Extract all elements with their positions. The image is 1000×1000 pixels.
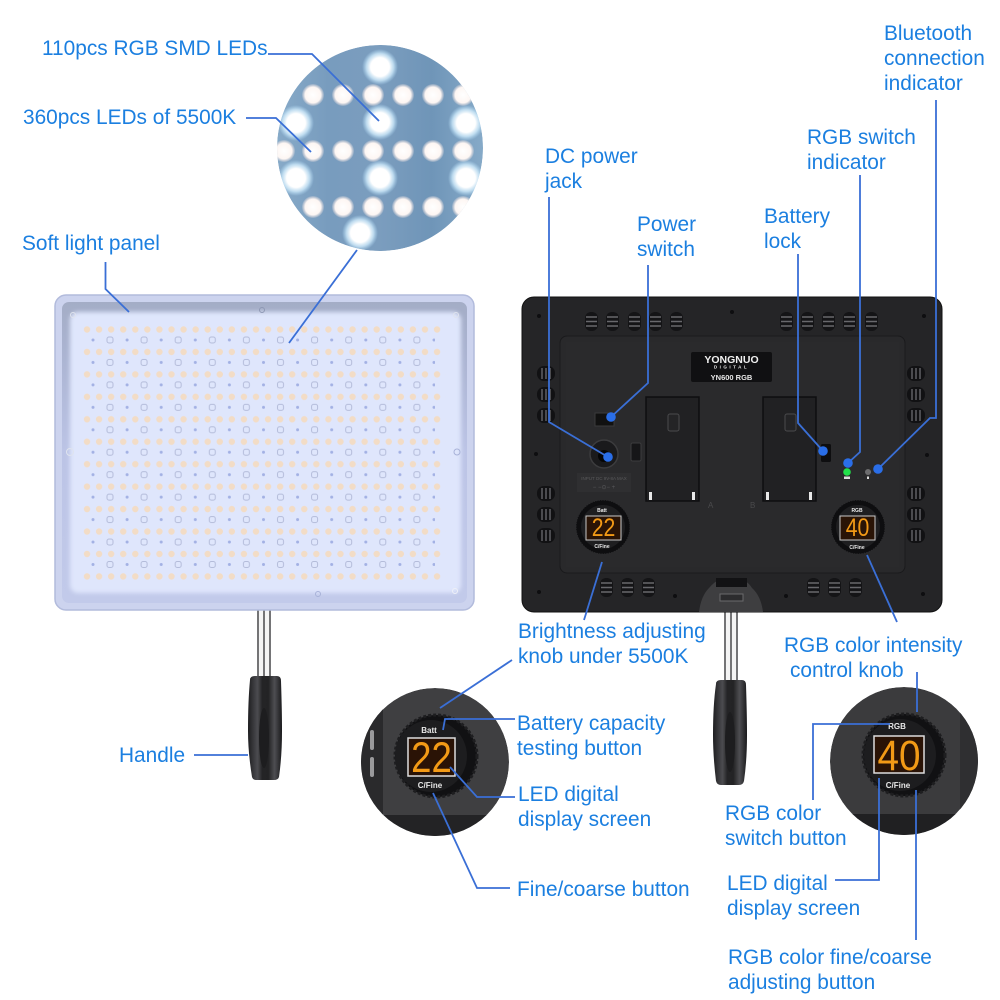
bluetooth indicator LED xyxy=(865,469,871,479)
label: brightness knob: knob under 5500K xyxy=(518,645,688,668)
inset: left knob closeup xyxy=(355,688,513,840)
vents xyxy=(537,312,925,597)
inset: right knob closeup xyxy=(830,687,980,837)
logo plate: YONGNUO xyxy=(704,354,759,366)
label: handle: Handle xyxy=(119,744,185,767)
input rating plate xyxy=(577,473,631,492)
right knob: 40 xyxy=(846,513,869,541)
label: bluetooth indicator: Bluetooth xyxy=(884,22,972,45)
connector dots xyxy=(603,412,883,474)
battery lock xyxy=(821,444,831,462)
label: LED screen right: display screen xyxy=(727,897,860,920)
callout lines front xyxy=(106,54,379,755)
label: power switch: switch xyxy=(637,238,695,261)
label: LED screen left: display screen xyxy=(518,808,651,831)
logo plate: YN600 RGB xyxy=(711,373,753,382)
label: battery lock: Battery xyxy=(764,205,830,228)
icon: left handle xyxy=(248,608,282,780)
screws xyxy=(534,310,929,598)
right knob: RGB xyxy=(851,508,863,514)
left knob: Batt xyxy=(597,508,607,514)
label: RGB LEDs: 110pcs RGB SMD LEDs xyxy=(42,37,268,60)
label: RGB switch indicator: indicator xyxy=(807,151,886,174)
panel: back of the light xyxy=(522,297,942,612)
side switch xyxy=(631,443,641,461)
label: LED screen left: LED digital xyxy=(518,783,619,806)
warm LEDs xyxy=(273,84,474,218)
bottom mount xyxy=(699,578,763,612)
inset: left knob closeup: Batt xyxy=(421,726,437,735)
label: RGB intensity knob: RGB color intensity xyxy=(784,634,962,657)
slot letter B: B xyxy=(750,501,755,510)
label: power switch: Power xyxy=(637,213,696,236)
label: RGB color switch: RGB color xyxy=(725,802,821,825)
label: RGB color switch: switch button xyxy=(725,827,847,850)
label: RGB fine coarse: adjusting button xyxy=(728,971,875,994)
left knob: C/Fine xyxy=(594,544,610,550)
inset: right knob closeup: RGB xyxy=(888,722,906,731)
left knob: 22 xyxy=(592,513,615,541)
label: LED screen right: LED digital xyxy=(727,872,828,895)
label: fine coarse button: Fine/coarse button xyxy=(517,878,690,901)
icon: right handle xyxy=(713,610,747,785)
label: battery lock: lock xyxy=(764,230,802,253)
label: bluetooth indicator: indicator xyxy=(884,72,963,95)
label: 5500K LEDs: 360pcs LEDs of 5500K xyxy=(23,106,236,129)
logo plate xyxy=(691,352,772,382)
right knob: C/Fine xyxy=(849,545,865,551)
panel: magnified view of LEDs xyxy=(273,45,484,251)
inset: left knob closeup: C/Fine xyxy=(418,781,443,790)
label: RGB fine coarse: RGB color fine/coarse xyxy=(728,946,932,969)
power switch xyxy=(595,413,614,426)
callout lines insets xyxy=(433,660,917,940)
left knob xyxy=(576,500,630,554)
label: RGB switch indicator: RGB switch xyxy=(807,126,916,149)
input rating plate: INPUT DC 9V-8A MAX xyxy=(581,476,627,481)
label: soft light panel: Soft light panel xyxy=(22,232,160,255)
inset: right knob closeup: 40 xyxy=(877,731,921,779)
cool RGB LEDs xyxy=(278,49,484,251)
logo plate: DIGITAL xyxy=(714,364,749,370)
battery slot A xyxy=(646,397,699,501)
input rating plate: − −⊙− + xyxy=(593,485,616,491)
label: battery test button: Battery capacity xyxy=(517,712,665,735)
label: DC power jack: DC power xyxy=(545,145,638,168)
label: brightness knob: Brightness adjusting xyxy=(518,620,706,643)
inset: left knob closeup: 22 xyxy=(411,734,452,782)
label: battery test button: testing button xyxy=(517,737,642,760)
DC jack xyxy=(590,440,618,468)
right knob xyxy=(831,500,885,554)
slot letters: A xyxy=(708,501,714,510)
inset: right knob closeup: C/Fine xyxy=(886,781,911,790)
green indicator LED xyxy=(843,468,851,479)
label: DC power jack: jack xyxy=(544,170,583,193)
battery slot B xyxy=(763,397,816,501)
panel: front LED light panel xyxy=(55,295,474,610)
label: RGB intensity knob: control knob xyxy=(790,659,904,682)
callout lines back xyxy=(549,100,936,622)
label: bluetooth indicator: connection xyxy=(884,47,985,70)
